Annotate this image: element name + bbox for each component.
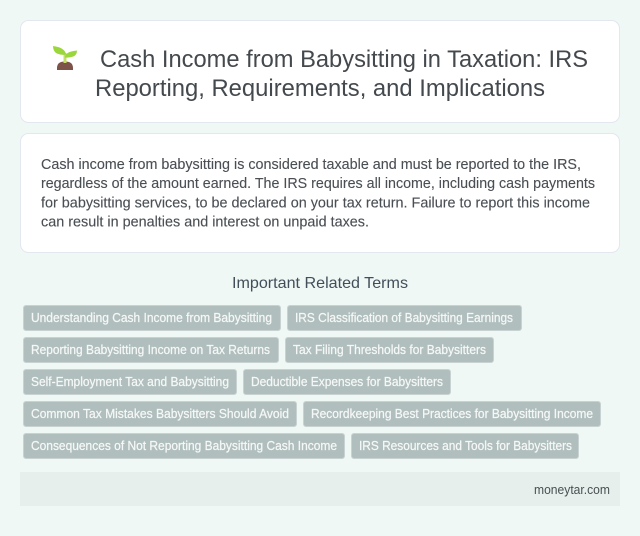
title [95,46,588,102]
description text: can result in penalties and interest on unpaid taxes. [41,214,369,230]
heading: related terms: Important Related Terms [232,275,408,292]
tag [24,402,296,426]
tag [352,434,578,458]
tag [24,306,280,330]
tag [244,370,450,394]
tag: Deductible Expenses for Babysitters [251,375,443,389]
tag: IRS Classification of Babysitting Earnings [295,311,513,325]
tag [286,338,494,362]
tag: Tax Filing Thresholds for Babysitters [293,343,486,357]
icon: seedling [53,46,77,70]
tag [304,402,600,426]
tag [24,370,236,394]
tag: Common Tax Mistakes Babysitters Should Avoid [31,407,289,421]
description text: regardless of the amount earned. The IRS requires all income, including cash payments [41,175,595,192]
title: Cash Income from Babysitting in Taxation: IRS [100,46,588,73]
description text: Cash income from babysitting is considered taxable and must be reported to the IRS, [41,156,581,173]
panel: description [20,134,620,252]
tag: Consequences of Not Reporting Babysitting Cash Income [31,439,337,453]
tag [24,338,278,362]
tag: Self-Employment Tax and Babysitting [31,375,229,389]
tag [288,306,522,330]
tag: Understanding Cash Income from Babysitting [31,311,272,325]
description text [41,156,595,230]
description text: for babysitting services, to be declared on your tax return. Failure to report this income [41,194,590,212]
tag: Recordkeeping Best Practices for Babysitting Income [311,407,593,421]
tag list [24,306,600,458]
tag: IRS Resources and Tools for Babysitters [359,439,572,453]
footer credit: moneytar.com [534,483,610,497]
title: Reporting, Requirements, and Implications [95,75,545,102]
tag: Reporting Babysitting Income on Tax Returns [31,343,270,357]
footer [20,472,620,506]
tag [24,434,344,458]
panel: title card [20,20,620,122]
